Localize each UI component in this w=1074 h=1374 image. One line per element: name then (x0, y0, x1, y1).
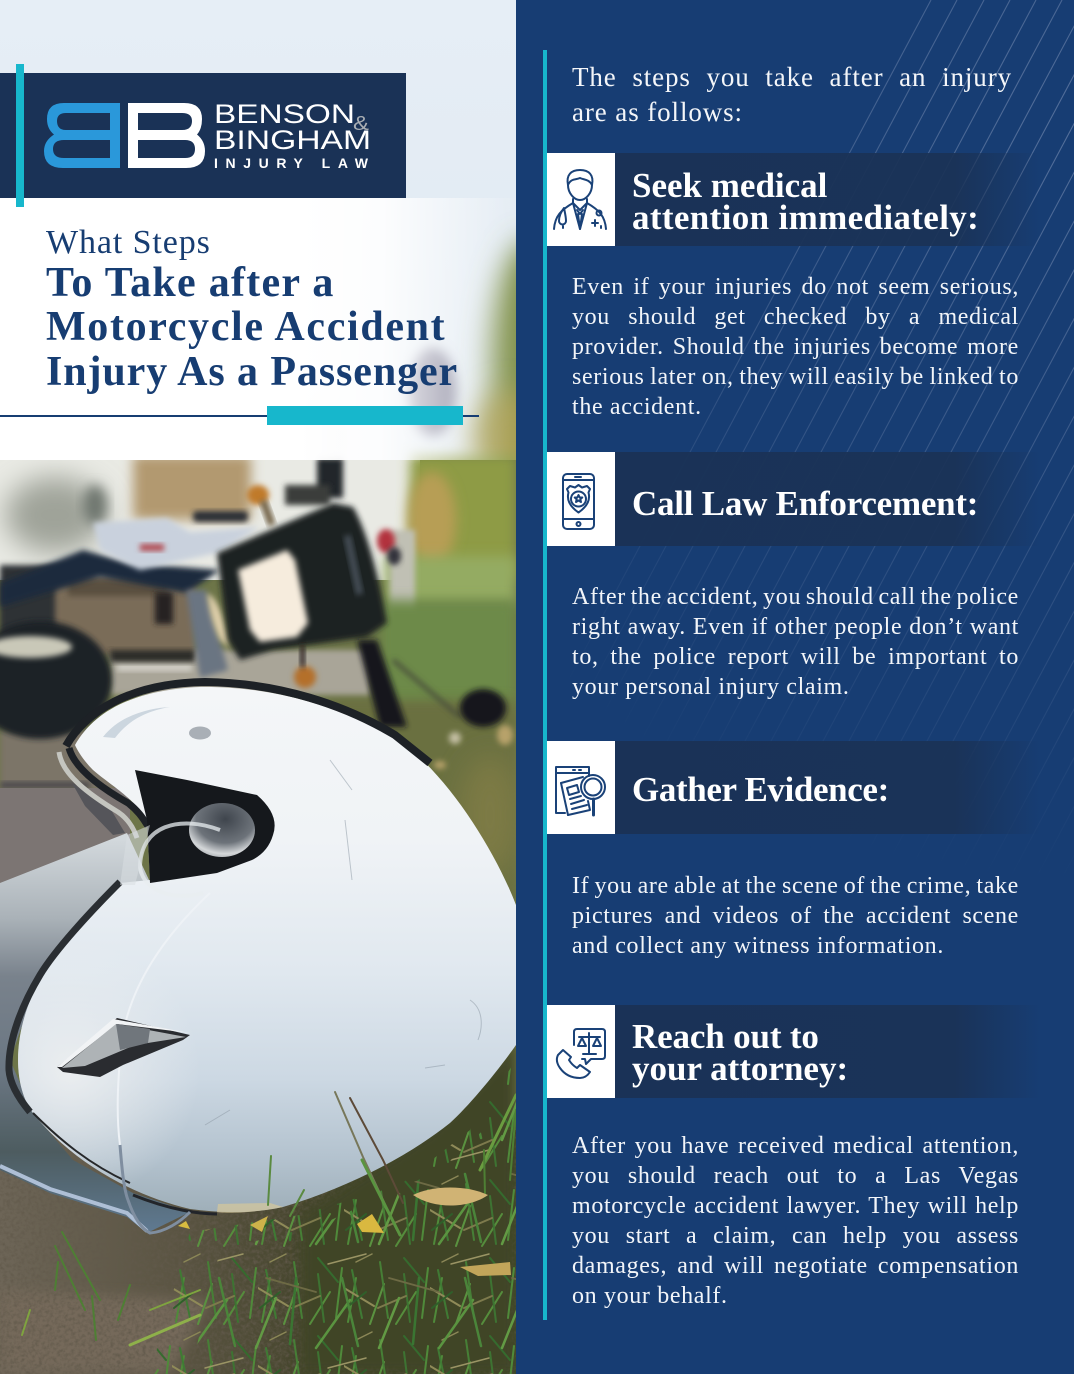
helmet rims (66, 682, 430, 763)
step 4 body text: After you have received medical attention, (572, 1133, 1019, 1159)
step 2 body text: your personal injury claim. (572, 674, 849, 700)
step 3 heading bar (615, 741, 1040, 834)
photo background (0, 460, 516, 1130)
step 2 body text: to, the police report will be important to (572, 644, 1019, 670)
helmet scratches (205, 760, 481, 1125)
step 1 body text: Even if your injuries do not seem serious, (572, 274, 1019, 300)
logo mark: BB monogram (44, 103, 205, 168)
step 3 body text: and collect any witness information. (572, 933, 944, 959)
step 4 body text (572, 1133, 1019, 1309)
step 2 heading bar (615, 452, 1040, 546)
visor lower part (0, 833, 190, 1233)
step 3 heading: Gather Evidence: (632, 770, 889, 809)
step 1 heading bar (615, 153, 1040, 246)
step 4 body text: you start a claim, can help you assess (572, 1223, 1019, 1249)
title (46, 224, 458, 395)
step 3 body text (572, 873, 1019, 959)
step 4 body text: motorcycle accident lawyer. They will help (572, 1193, 1019, 1219)
leaves (178, 1187, 511, 1276)
step 4 body text: you should reach out to a Las Vegas (572, 1163, 1019, 1189)
photo: motorcycle and helmet after accident (0, 0, 516, 1374)
accent: teal logo bar (16, 64, 24, 207)
title accent: teal block (267, 406, 463, 425)
logo wordmark: & (353, 113, 370, 135)
road (0, 728, 116, 788)
distant trees behind title band (468, 225, 516, 426)
step 3: gather evidence (547, 741, 1019, 959)
visor opening (135, 770, 275, 883)
step 3 icon box: documents and magnifier (547, 741, 615, 834)
step 1: seek medical attention (547, 153, 1028, 420)
step 1 body text: you should get checked by a medical (572, 304, 1019, 330)
intro text: are as follows: (572, 97, 743, 127)
step 4 icon box: phone and scales (547, 1005, 615, 1098)
logo wordmark: BENSON (214, 99, 355, 129)
step 2: call law enforcement (547, 452, 1025, 700)
visor pivot and edge (138, 822, 221, 883)
motorcycle (0, 458, 506, 739)
step 3 body text: pictures and videos of the accident scene (572, 903, 1019, 929)
accent: teal vertical line (543, 50, 547, 1320)
step 1 body text (572, 274, 1019, 420)
logo wordmark: BINGHAM (214, 125, 371, 155)
step 1 body text: provider. Should the injuries become more (572, 334, 1019, 360)
step 2 body text: right away. Even if other people don’t want (572, 614, 1019, 640)
title: To Take after a (46, 260, 335, 306)
title: Injury As a Passenger (46, 349, 458, 395)
title: What Steps (46, 224, 211, 261)
logo wordmark: INJURY LAW (214, 155, 369, 171)
step 2 body text: After the accident, you should call the police (572, 584, 1019, 610)
step 4 heading: Reach out to (632, 1017, 819, 1056)
step 4: reach out to attorney: your attorney: (632, 1049, 848, 1088)
step 1 icon box: doctor (547, 153, 615, 246)
title panel: white band (0, 198, 516, 460)
step 1 body text: serious later on, they will easily be linked to (572, 364, 1019, 390)
ground and grass (0, 1130, 516, 1374)
step 1: seek medical attention: attention immediately: (632, 198, 979, 237)
intro text (572, 62, 1012, 127)
right panel pattern: diagonal lines (616, 0, 1074, 778)
title rule (0, 415, 479, 417)
step 1 body text: the accident. (572, 394, 702, 420)
step 3 body text: If you are able at the scene of the crime, take (572, 873, 1019, 899)
logo (44, 99, 371, 171)
logo panel (0, 73, 406, 198)
step 1 heading: Seek medical (632, 166, 827, 205)
step 4 body text: on your behalf. (572, 1283, 728, 1309)
step 4 body text: damages, and will negotiate compensation (572, 1253, 1019, 1279)
step 2 body text (572, 584, 1019, 700)
step 2 icon box: phone with police badge (547, 452, 615, 546)
title: Motorcycle Accident (46, 304, 446, 350)
intro text: The steps you take after an injury (572, 62, 1012, 92)
step 2 heading: Call Law Enforcement: (632, 484, 978, 523)
step 4 heading bar (615, 1005, 1040, 1098)
grass blades (150, 1060, 516, 1374)
helmet shell (18, 687, 516, 1212)
logo wordmark (214, 99, 371, 171)
helmet vent (57, 1018, 190, 1077)
